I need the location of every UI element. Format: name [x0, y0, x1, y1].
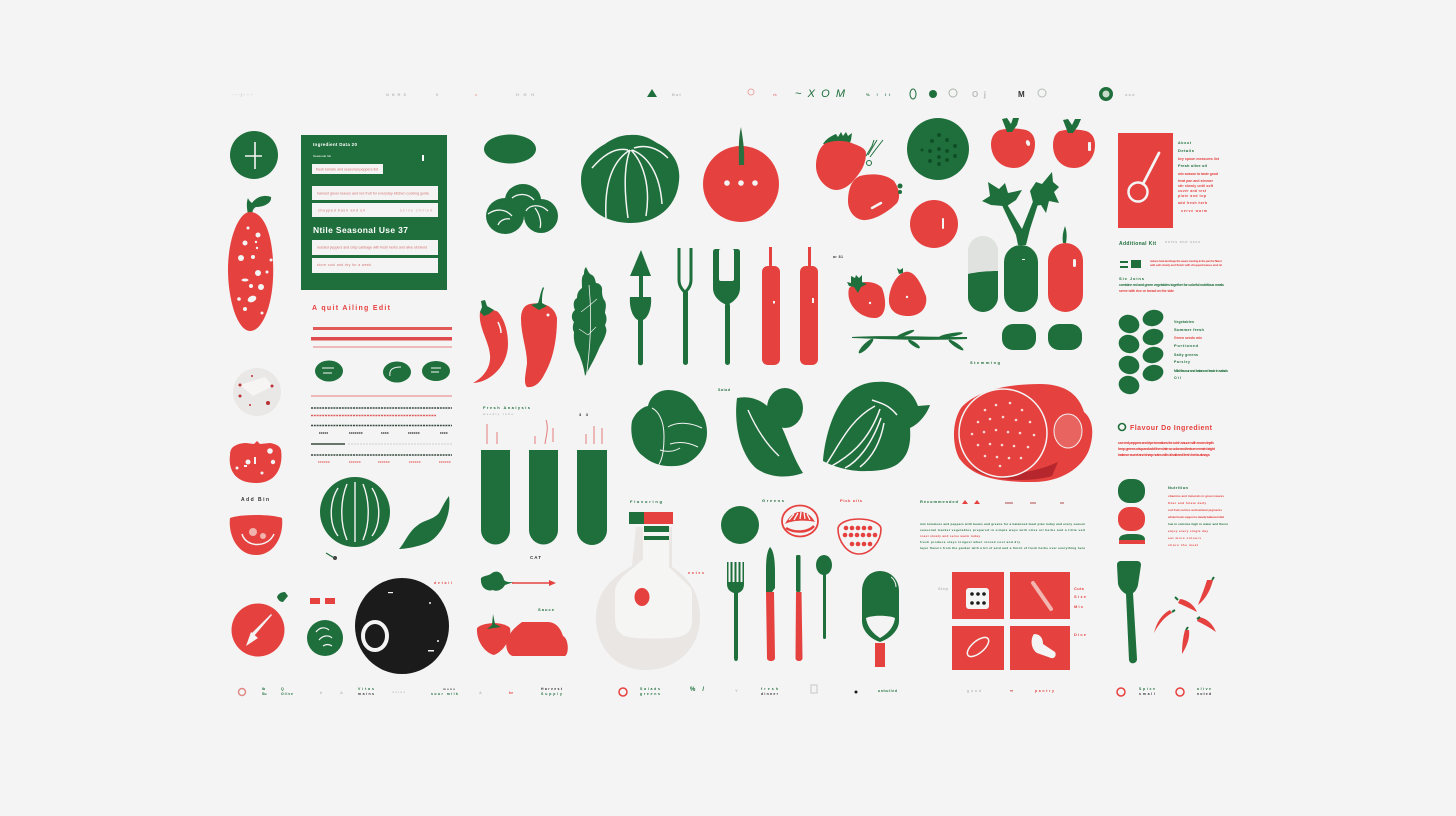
- bottom strip of small labels: Harvest: [541, 687, 563, 691]
- icon: red tomato with stem: [703, 127, 779, 222]
- top strip of small labels: M: [1018, 90, 1025, 99]
- icon: green capsule: [1004, 245, 1038, 312]
- labels beside grid: Mix: [1074, 604, 1084, 609]
- panel: red spoon card: [1118, 133, 1173, 228]
- labels above bowls: [718, 388, 863, 503]
- text block: seed notes: Green seeds mix: [1174, 336, 1202, 340]
- text block: seed notes: Vegetables: [1174, 320, 1194, 324]
- bottom strip of small labels: notes: [392, 690, 405, 694]
- text block: pill notes: fiber and folate daily: [1168, 501, 1206, 505]
- text block: heading above tubes: [482, 405, 589, 417]
- panel: green list: [301, 135, 447, 290]
- bottom strip of small labels: fresh: [761, 687, 778, 691]
- labels beside grid: Dice: [1074, 632, 1087, 637]
- top strip of small labels: 0: [436, 92, 439, 97]
- small labels around bottle: Flavoring: [630, 499, 663, 504]
- bottom strip of small labels: A: [479, 690, 482, 695]
- icon: red ball: [910, 200, 958, 248]
- text block: heading above tubes: weekly tube: [482, 412, 513, 416]
- bottom strip of small labels: unhulled: [878, 689, 897, 693]
- icon: green spoon: [816, 555, 832, 639]
- panel: green list: chopped basil and oil: [318, 208, 365, 212]
- bottom strip of small labels: noted: [1197, 692, 1211, 696]
- text block: right summary: Additional Kit: [1119, 241, 1156, 247]
- icon: big green cabbage: [823, 382, 930, 471]
- bottom strip of small labels: Salads: [640, 687, 660, 691]
- icon: green circle with cross: [230, 131, 278, 179]
- panel: green list: harvest green leaves and red fruit for everyday kitchen cooking guide: [317, 192, 429, 196]
- text block: heading above tubes: 33: [579, 412, 589, 417]
- icon: green leaf and bulb: [736, 388, 803, 476]
- icon: red chili pepper: [473, 300, 508, 383]
- bottom strip of small labels: greens: [640, 692, 660, 696]
- text block: pill notes: low in calories high in water and flavor: [1168, 522, 1229, 526]
- text block: center right notes: fresh produce stays longest when stored cool and dry: [920, 540, 1020, 544]
- small label: Stemming: [970, 360, 1001, 365]
- icon: red tomato and red blocks: [477, 622, 568, 656]
- icon: green shape with red arrow: [481, 572, 556, 591]
- icon: tomato stem: [487, 614, 501, 629]
- text block: spoon card notes: cover and rest: [1178, 189, 1207, 193]
- icon: red bowl tomato: [230, 515, 282, 555]
- icon: green pumpkin: [581, 135, 679, 223]
- panel: green list: Seasonal list: [313, 154, 331, 158]
- labels above bowls: Greens: [762, 498, 785, 503]
- labels beside grid: Step: [938, 586, 949, 591]
- text block: center right notes: layer flavors from the garden with a bit of acid and a finish of fresh herbs over everything here: [920, 546, 1085, 550]
- text block: center right notes: Recommended: [920, 499, 959, 504]
- labels above bowls: Pick oils: [840, 498, 863, 503]
- small label: CAT: [530, 555, 541, 560]
- icon: white speckled disc: [233, 368, 281, 416]
- icon: red strawberries: [847, 268, 926, 318]
- bottom strip of small labels: Y: [735, 688, 738, 693]
- top strip of small labels: v: [475, 92, 478, 97]
- icon: red tomato: [230, 441, 281, 483]
- text block: pill notes: red fruit carries antioxidant pigments: [1168, 508, 1222, 512]
- icon: small marker: [326, 553, 337, 560]
- icon: three green beans: [315, 360, 450, 382]
- bottom strip of small labels: [238, 685, 1211, 696]
- top strip of small labels: HHH: [516, 92, 534, 97]
- icon: red capsule: [1048, 226, 1083, 312]
- text block: pill notes: [1167, 485, 1229, 547]
- icon: split capsule: [968, 236, 998, 312]
- bottom strip of small labels: good: [967, 689, 981, 693]
- labels above bowls: Salad: [718, 388, 730, 392]
- icon: red long pepper: [521, 287, 557, 387]
- bottom strip of small labels: mains: [358, 692, 374, 696]
- heading: red section: A quit Ailing Edit: [312, 305, 391, 312]
- bottom strip of small labels: Olive: [281, 692, 293, 696]
- bottom strip of small labels: olive: [1197, 687, 1211, 691]
- icon: red carrot: [228, 196, 273, 331]
- small label: Sauce: [538, 607, 555, 612]
- text block: pill notes: Nutrition: [1168, 485, 1189, 490]
- icon: brussels sprouts: [486, 184, 558, 234]
- text block: seed notes: Parsley: [1174, 360, 1190, 364]
- heading: ingredient title: Flavour Do Ingredient: [1130, 425, 1213, 432]
- red rule lines: [311, 327, 452, 396]
- icon: green herb leaf: [572, 267, 606, 386]
- text block: spoon card notes: add fresh herb: [1178, 201, 1207, 205]
- bottom strip of small labels: mono: [443, 687, 455, 691]
- small labels around bottle: notes: [688, 571, 704, 575]
- text block: seed notes: Mild flavour and balanced taste in salads: [1174, 369, 1228, 373]
- icon: green leaf: [399, 496, 449, 549]
- text block: center right notes: roast slowly and serve warm today: [920, 534, 980, 538]
- text block: spoon card notes: serve warm: [1181, 209, 1207, 213]
- icon: red striped fruit: [782, 506, 818, 536]
- small labels around bottle: [630, 499, 704, 575]
- icon: small highlights on bars: [773, 298, 814, 304]
- text block: right summary: add salt slowly and finish with chopped leaves and oil: [1150, 263, 1222, 267]
- icon: small green leaf: [277, 592, 288, 602]
- text block: seed notes: Summer fresh: [1174, 327, 1205, 332]
- text block: center right notes: mix tomatoes and peppers with beans and greens for a balanced meal plan today and every season: [920, 522, 1085, 526]
- text block: spoon card notes: [1178, 141, 1220, 213]
- text block: spoon card notes: key spoon measures list: [1178, 157, 1220, 161]
- text block: spoon card notes: plate and top: [1178, 194, 1206, 198]
- icon: red tomato one: [991, 118, 1035, 168]
- text block: red paragraph: keep greens crisp and add them late so color and texture remain bright: [1118, 446, 1216, 451]
- top strip of small labels: ~XOM: [795, 88, 846, 100]
- text block: spoon card notes: heat pan and simmer: [1178, 179, 1214, 183]
- bottom strip of small labels: dinner: [761, 692, 779, 696]
- icon: green bean: [484, 134, 536, 164]
- bottom strip of small labels: Q: [281, 687, 284, 691]
- icon: red dashes: [310, 598, 335, 604]
- bottom strip of small labels: Supply: [541, 692, 562, 696]
- text block: right summary: combine red and green vegetables together for colorful nutritious meals: [1119, 283, 1224, 287]
- icon: green dish: [721, 506, 759, 544]
- bottom strip of small labels: Vitas: [358, 687, 374, 691]
- label: Add Bin: [241, 497, 269, 503]
- bottom strip of small labels: A: [340, 690, 343, 695]
- text block: right summary: [1119, 240, 1224, 293]
- icon: stacked pills: [1118, 479, 1145, 544]
- icon: test tubes: [481, 420, 607, 545]
- icon: small green ball: [307, 620, 343, 656]
- icon: green fork lower: [727, 562, 744, 661]
- labels beside grid: Cuts: [1074, 586, 1085, 591]
- icon: red square grid: [952, 572, 1070, 670]
- text block: pill notes: whole foods support a steady balanced diet: [1167, 515, 1224, 519]
- text block: spoon card notes: stir slowly until soft: [1178, 184, 1214, 188]
- icon: red tomato two: [1053, 119, 1095, 168]
- icon: red bowl with seeds: [838, 519, 881, 554]
- icon: black olive: [355, 578, 449, 674]
- bottom strip of small labels: pantry: [1035, 689, 1054, 693]
- top strip of small labels: Oj: [972, 90, 986, 99]
- icon: red circle knife: [232, 604, 284, 656]
- bottom strip of small labels: hr: [509, 690, 513, 695]
- top strip of small labels: · ·· · | ·· ·· ··: [232, 92, 253, 97]
- text block: spoon card notes: Details: [1178, 148, 1195, 153]
- text block: pill notes: share the meal: [1168, 543, 1198, 547]
- icon: red fruits cluster: [816, 132, 902, 220]
- top strip of small labels: B a t: [672, 92, 681, 97]
- text block: pill notes: enjoy every single day: [1168, 529, 1208, 533]
- text block: pill notes: vitamins and minerals in green leaves: [1168, 494, 1224, 498]
- bottom strip of small labels: Su: [262, 692, 266, 696]
- icon: green branch: [852, 329, 967, 355]
- panel: green list: roasted peppers and crisp cabbage with fresh herbs and olive oil blend: [317, 246, 427, 250]
- icon: green seed cluster: [1116, 308, 1165, 397]
- text block: spoon card notes: Fresh olive oil: [1178, 163, 1207, 168]
- panel: green list: Ntile Seasonal Use 37: [313, 225, 408, 235]
- top strip of small labels: NNRS: [386, 92, 406, 97]
- icon: green ladle: [713, 249, 740, 365]
- top strip of small labels: [232, 87, 1135, 101]
- text block: red paragraph: [1118, 440, 1216, 457]
- text block: red paragraph: balance sweet and sharp notes with oil salt and fresh herbs always: [1118, 452, 1211, 457]
- text block: seed notes: [1174, 320, 1228, 380]
- icon: red bottle bars: [762, 247, 818, 365]
- icon: herb plant top: [982, 172, 1059, 245]
- text block: red paragraph: use red peppers and ripe tomatoes for a rich sauce with more depth: [1118, 440, 1215, 445]
- text block: seed notes: Oil: [1174, 376, 1181, 380]
- text block: right summary: Six Joins: [1119, 276, 1145, 281]
- text block: right summary: notes and uses: [1165, 240, 1200, 244]
- icon: green arrow utensil: [630, 250, 651, 365]
- text block: spoon card notes: About: [1178, 141, 1192, 145]
- text block: center right notes: [920, 499, 1085, 550]
- bottom strip of small labels: Ib: [262, 687, 265, 691]
- text block: center right notes: seasonal market vegetables prepared in simple ways with olive oil herbs and a little salt: [920, 528, 1085, 532]
- small red label: detail: [434, 581, 452, 585]
- panel title: Ingredient Data 20: [313, 142, 357, 147]
- bottom strip of small labels: Spice: [1139, 687, 1155, 691]
- bottom strip of small labels: sour milk: [431, 692, 458, 696]
- panel: green list: fresh tomato and seasonal peppers list: [316, 168, 378, 172]
- bottom strip of small labels: small: [1139, 692, 1155, 696]
- icon: knife red green: [766, 547, 775, 661]
- icon: green fork: [679, 248, 691, 365]
- text block: right summary: reduce heat and keep the sauce moving in the pan for flavor: [1150, 259, 1223, 263]
- text block: seed notes: Salty greens: [1174, 353, 1198, 357]
- icon: green round with dots: [907, 118, 969, 180]
- top strip of small labels: % ! li: [866, 92, 890, 97]
- icon: two green pills: [1002, 324, 1082, 350]
- text block: dotted data lines: [311, 408, 452, 462]
- icon: oil bottle: [596, 512, 700, 670]
- labels beside grid: [938, 586, 1087, 637]
- text block: pill notes: eat more colours: [1168, 536, 1201, 540]
- small label: ar 81: [833, 255, 843, 259]
- icon: small red peppers: [1154, 577, 1216, 654]
- bottom strip of small labels: ii: [320, 690, 322, 695]
- text block: right summary: serve with rice or bread on the side: [1119, 289, 1174, 293]
- icon: pill spoon: [862, 571, 899, 667]
- bottom strip of small labels: %/: [690, 687, 704, 693]
- icon: cabbage: [631, 390, 707, 466]
- panel: green list: store cool and dry for a week: [317, 263, 371, 267]
- text block: spoon card notes: mix season to taste good: [1178, 172, 1218, 176]
- text block: heading above tubes: Fresh Analysis: [483, 405, 531, 410]
- icon: green spatula: [1117, 561, 1141, 663]
- panel: green list: serve chilled: [400, 208, 432, 212]
- icon: butter knife: [796, 555, 802, 661]
- text block: seed notes: Portioned: [1174, 343, 1199, 348]
- labels beside grid: Size: [1074, 594, 1087, 599]
- top strip of small labels: rk: [773, 92, 778, 97]
- icon: red sliced meat: [954, 384, 1092, 482]
- top strip of small labels: o o o: [1125, 92, 1135, 97]
- icon: green watermelon: [320, 477, 390, 547]
